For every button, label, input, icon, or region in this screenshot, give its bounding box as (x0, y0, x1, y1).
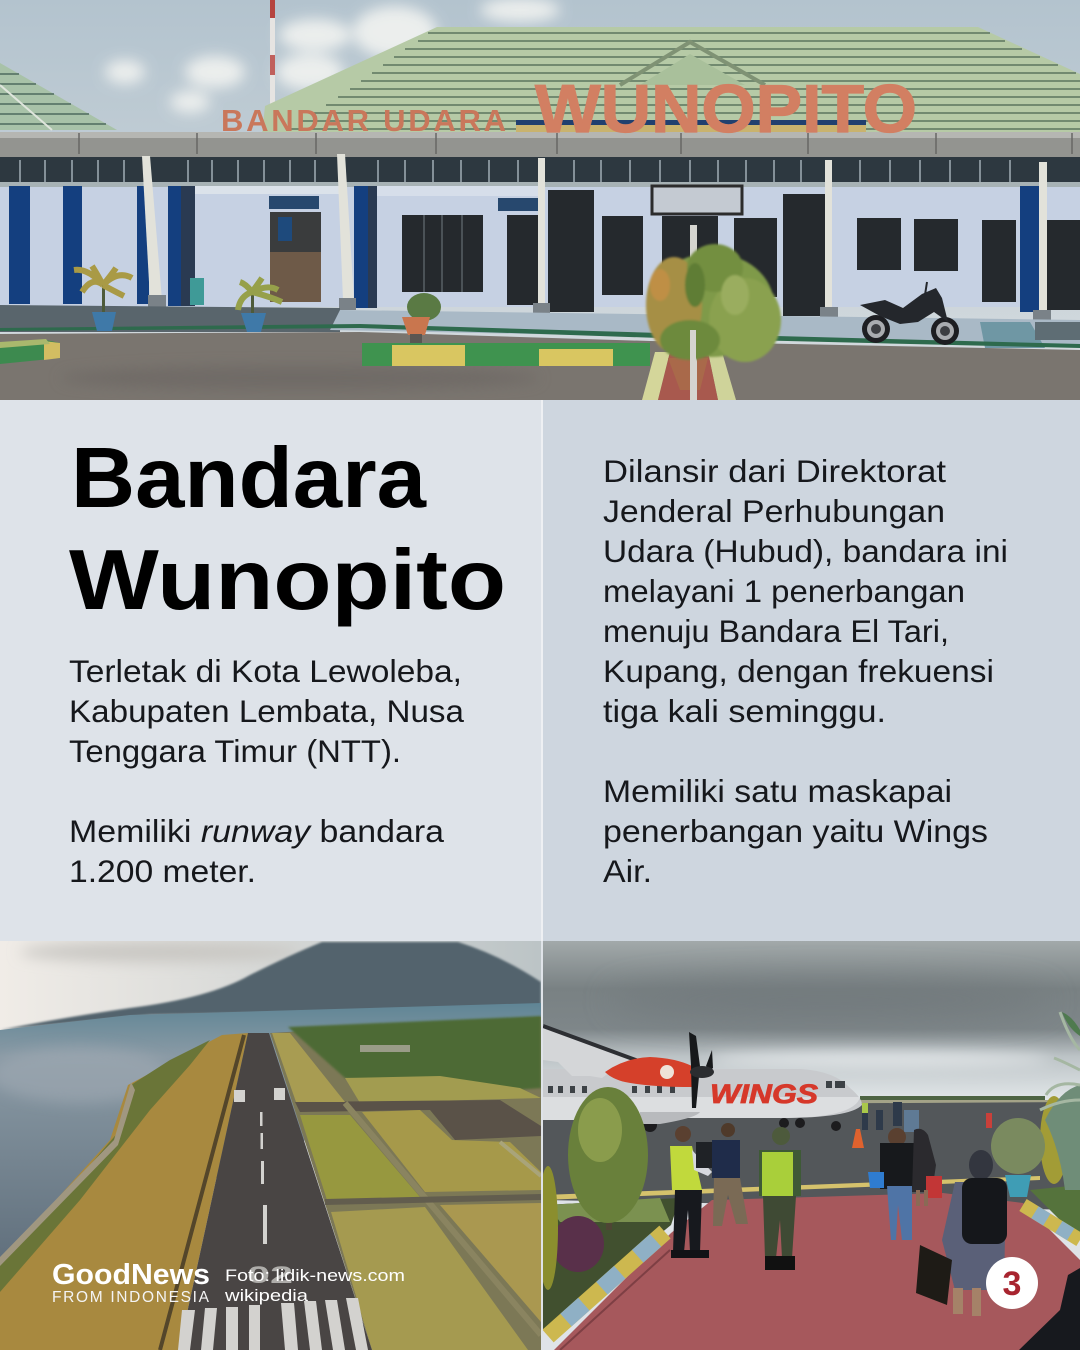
dark doors and windows (402, 190, 1080, 316)
engine (605, 1057, 692, 1087)
tree in foreground (646, 225, 781, 400)
sea (0, 1003, 541, 1270)
photo credit (225, 1269, 404, 1304)
palm leaves (1040, 1012, 1080, 1190)
terminal wall (0, 185, 1080, 307)
grass fields (272, 1033, 541, 1350)
title: Bandara (71, 431, 427, 526)
woman walking with red bag (912, 1129, 942, 1206)
terracotta flower pot (402, 293, 441, 344)
propeller (689, 1032, 700, 1108)
title (69, 431, 506, 628)
flight text (603, 453, 1008, 729)
clerestory window band (0, 157, 1080, 196)
location text (69, 653, 464, 769)
airline text: penerbangan yaitu Wings (603, 813, 988, 849)
brown entrance door (270, 212, 321, 302)
flight text: Jenderal Perhubungan (603, 493, 945, 529)
roof sign: Wunopito: WUNOPITO (535, 71, 917, 147)
roof sign: Bandar Udara: BANDAR UDARA (221, 103, 506, 138)
white columns (142, 154, 1047, 312)
airline text (603, 773, 988, 889)
left roof (0, 63, 117, 130)
flight text: Udara (Hubud), bandara ini (603, 533, 1008, 569)
runway text: 1.200 meter. (69, 853, 256, 889)
yellow bushes (538, 1166, 558, 1290)
photo credit: Foto: lidik-news.com (225, 1266, 405, 1285)
terrace floor (0, 305, 1080, 348)
blue columns (9, 186, 1040, 312)
vegetation (288, 1016, 541, 1095)
main green roof (262, 27, 1080, 135)
fire extinguisher (986, 1113, 992, 1128)
mountain (0, 942, 541, 1030)
flight text: Dilansir dari Direktorat (603, 453, 946, 489)
airline text: Air. (603, 853, 652, 889)
photo: aerial runway (0, 941, 541, 1350)
upper field (345, 1076, 541, 1103)
officer in hi-vis vest (670, 1126, 712, 1258)
logo: GoodNews: FROM INDONESIA (52, 1289, 211, 1306)
airplane (543, 1025, 862, 1132)
trimmed cypress tree (568, 1087, 648, 1230)
service roads (325, 1103, 541, 1335)
traffic cone (852, 1129, 864, 1148)
kerb centre (362, 343, 650, 366)
pavement (554, 1193, 1080, 1350)
photo: passengers boarding Wings Air plane (538, 941, 1080, 1350)
kerb walkway (642, 352, 736, 400)
flight text: Kupang, dengan frekuensi (603, 653, 994, 689)
photo credit: wikipedia (224, 1286, 309, 1305)
runway strip (160, 1033, 372, 1350)
logo: GoodNews (53, 1263, 209, 1302)
grass corner (543, 1198, 680, 1330)
runway text: Memiliki runway bandara (69, 813, 445, 849)
wing (543, 1025, 645, 1078)
panel: right description (541, 400, 1080, 941)
flight text: tiga kali seminggu. (603, 693, 886, 729)
passenger with backpack (868, 1128, 916, 1240)
nun with backpack and bag (916, 1150, 1007, 1316)
title: Wunopito (69, 533, 506, 628)
flight text: melayani 1 penerbangan (603, 573, 965, 609)
soldier (759, 1127, 801, 1270)
kerb stripes (548, 1205, 1080, 1350)
logo: GoodNews: GoodNews (52, 1259, 210, 1291)
runway strip: 02 (247, 1262, 293, 1289)
landing gear (779, 1118, 789, 1128)
location text: Kabupaten Lembata, Nusa (69, 693, 464, 729)
canopy fascia (0, 132, 1080, 157)
page number badge (986, 1257, 1038, 1309)
Wings logotype: WINGS (710, 1079, 818, 1109)
location text: Terletak di Kota Lewoleba, (69, 653, 462, 689)
room signs (269, 196, 319, 209)
airline text: Memiliki satu maskapai (603, 773, 952, 809)
right fields base (270, 1017, 541, 1350)
bonsai in blue pot (991, 1118, 1045, 1197)
panel: left description (0, 400, 541, 941)
page number badge: 3 (1003, 1265, 1021, 1303)
location text: Tenggara Timur (NTT). (69, 733, 401, 769)
apron (295, 1100, 541, 1140)
man with backpack (696, 1123, 748, 1226)
photo: airport terminal building (0, 0, 1080, 400)
asphalt forecourt (0, 332, 1080, 400)
distant people (862, 1102, 919, 1132)
grass strip (0, 1033, 248, 1350)
antenna mast (270, 18, 275, 104)
motorcycle (860, 282, 959, 345)
potted palms (74, 266, 282, 332)
flight text: menuju Bandara El Tari, (603, 613, 949, 649)
person at bottom corner (1019, 1268, 1080, 1350)
kerb left (0, 339, 60, 364)
runway text (69, 813, 445, 889)
tarmac (543, 1102, 1080, 1210)
